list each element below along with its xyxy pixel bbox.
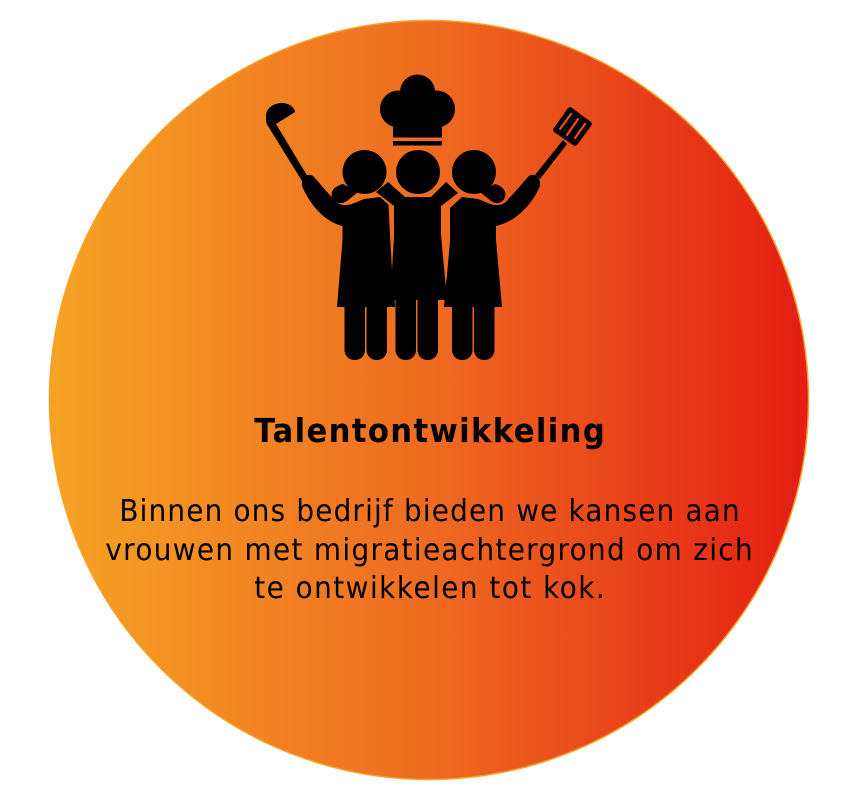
- icon: ladle: [266, 103, 308, 181]
- left cook hand on shoulder: [332, 184, 358, 203]
- right cook head: [452, 150, 496, 194]
- heading: Talentontwikkeling: [254, 411, 605, 450]
- figure: middle cook: [376, 150, 458, 360]
- gaps between figures: [388, 205, 450, 280]
- body text: [105, 493, 753, 605]
- icon: chef hat: [380, 74, 455, 146]
- icon: spatula: [535, 107, 592, 179]
- figure: left cook: [302, 175, 395, 360]
- body line 1: Binnen ons bedrijf bieden we kansen aan: [119, 493, 740, 528]
- left cook head: [342, 150, 386, 194]
- figure: right cook: [444, 175, 540, 360]
- body line 3: te ontwikkelen tot kok.: [254, 570, 605, 605]
- icon: chefs group: [266, 74, 592, 360]
- right cook hand on shoulder: [480, 184, 505, 203]
- body line 2: vrouwen met migratieachtergrond om zich: [105, 532, 753, 567]
